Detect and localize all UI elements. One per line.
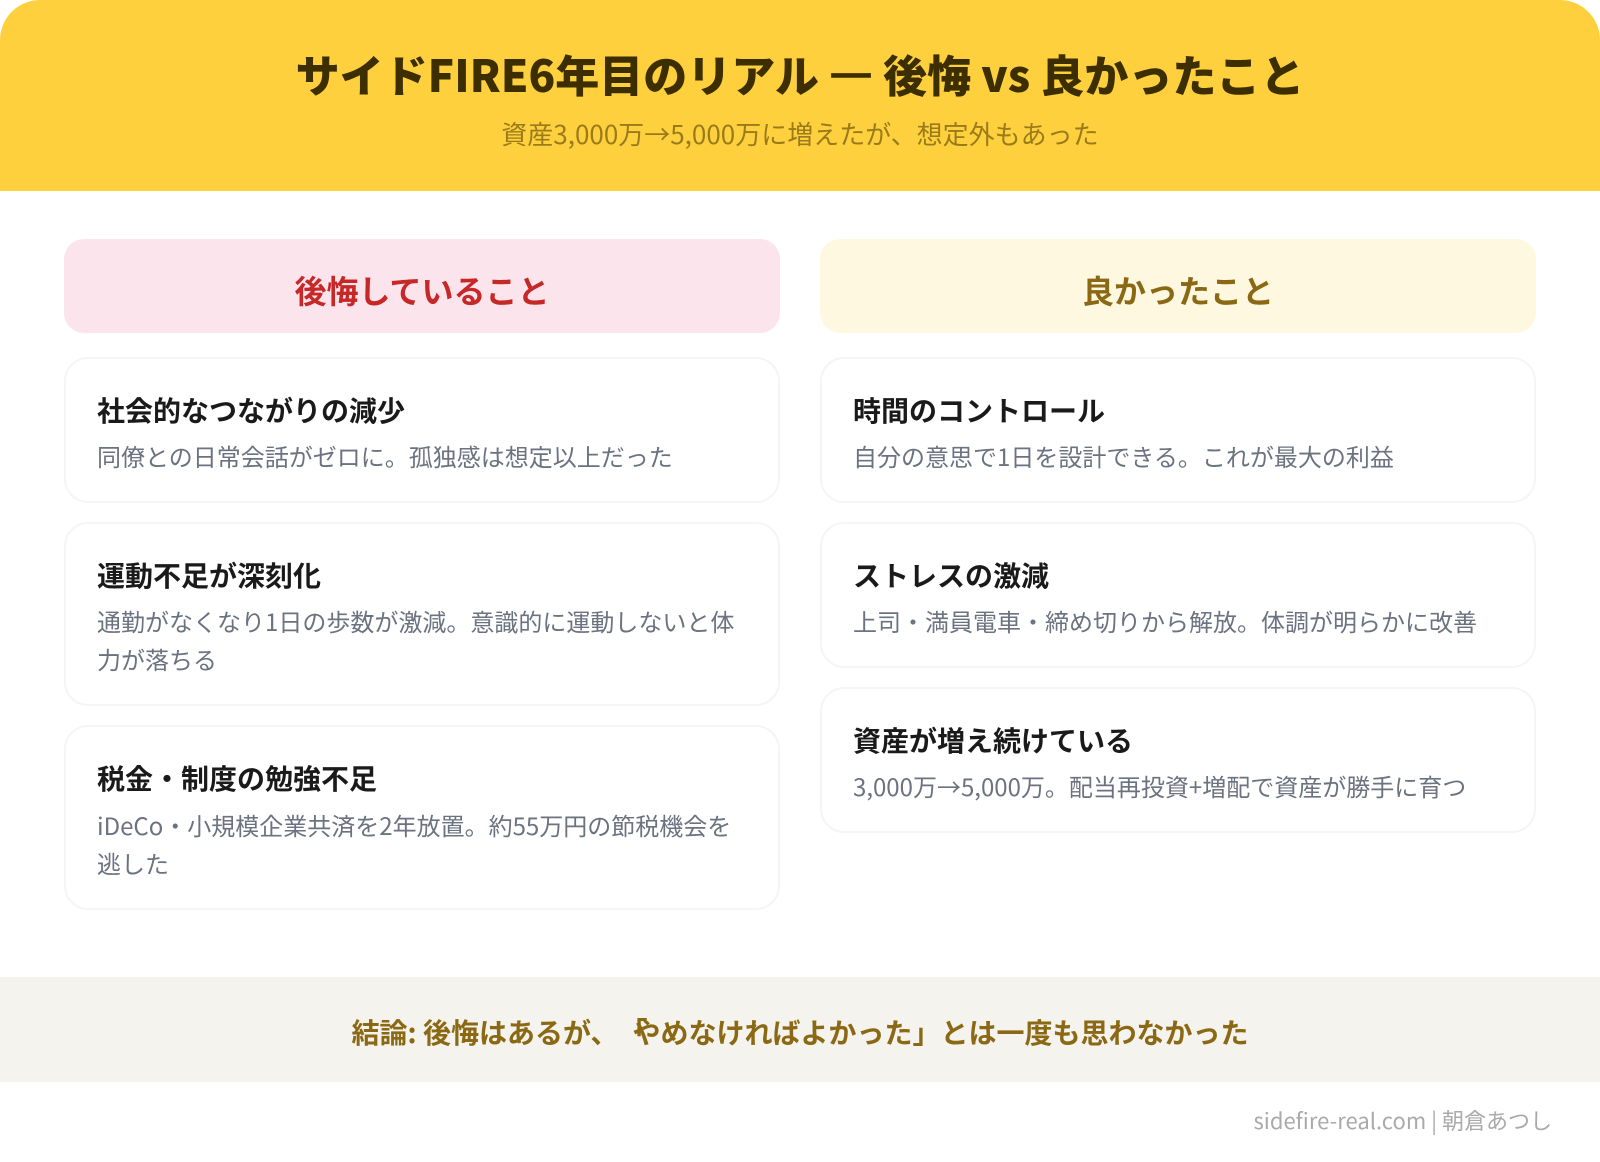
card text: 3,000万→5,000万。配当再投資+増配で資産が勝手に育つ — [853, 768, 1466, 803]
column heading: regrets — [64, 239, 780, 333]
card text: 同僚との日常会話がゼロに。孤独感は想定以上だった — [97, 438, 673, 473]
card text: iDeCo・小規模企業共済を2年放置。約55万円の節税機会を逃した — [97, 807, 731, 880]
card heading: 税金・制度の勉強不足 — [97, 758, 377, 798]
column heading: good things: 良かったこと — [1082, 267, 1274, 313]
header banner — [0, 0, 1600, 191]
subtitle: 資産3,000万→5,000万に増えたが、想定外もあった — [501, 115, 1099, 152]
card: lack of exercise — [64, 522, 780, 706]
card heading: 時間のコントロール — [853, 390, 1105, 430]
card text: 通勤がなくなり1日の歩数が激減。意識的に運動しないと体力が落ちる — [97, 603, 734, 676]
card text: 自分の意思で1日を設計できる。これが最大の利益 — [853, 438, 1394, 473]
card: growing assets — [820, 687, 1536, 833]
card heading: 運動不足が深刻化 — [97, 555, 321, 595]
conclusion band — [0, 977, 1600, 1082]
title: サイドFIRE6年目のリアル — 後悔 vs 良かったこと — [296, 41, 1304, 105]
card: control of time — [820, 357, 1536, 503]
card: tax study — [64, 725, 780, 910]
card heading: ストレスの激減 — [853, 555, 1049, 595]
card: social connections — [64, 357, 780, 503]
card heading: 資産が増え続けている — [853, 720, 1133, 760]
footer credit: sidefire-real.com | 朝倉あつし — [1253, 1104, 1552, 1136]
card heading: 社会的なつながりの減少 — [97, 390, 405, 430]
column heading: regrets: 後悔していること — [294, 267, 550, 313]
card text: 上司・満員電車・締め切りから解放。体調が明らかに改善 — [853, 603, 1477, 638]
card: less stress — [820, 522, 1536, 668]
column heading: good things — [820, 239, 1536, 333]
conclusion band: 結論: 後悔はあるが、 「やめなければよかった」とは一度も思わなかった — [352, 1011, 1248, 1052]
